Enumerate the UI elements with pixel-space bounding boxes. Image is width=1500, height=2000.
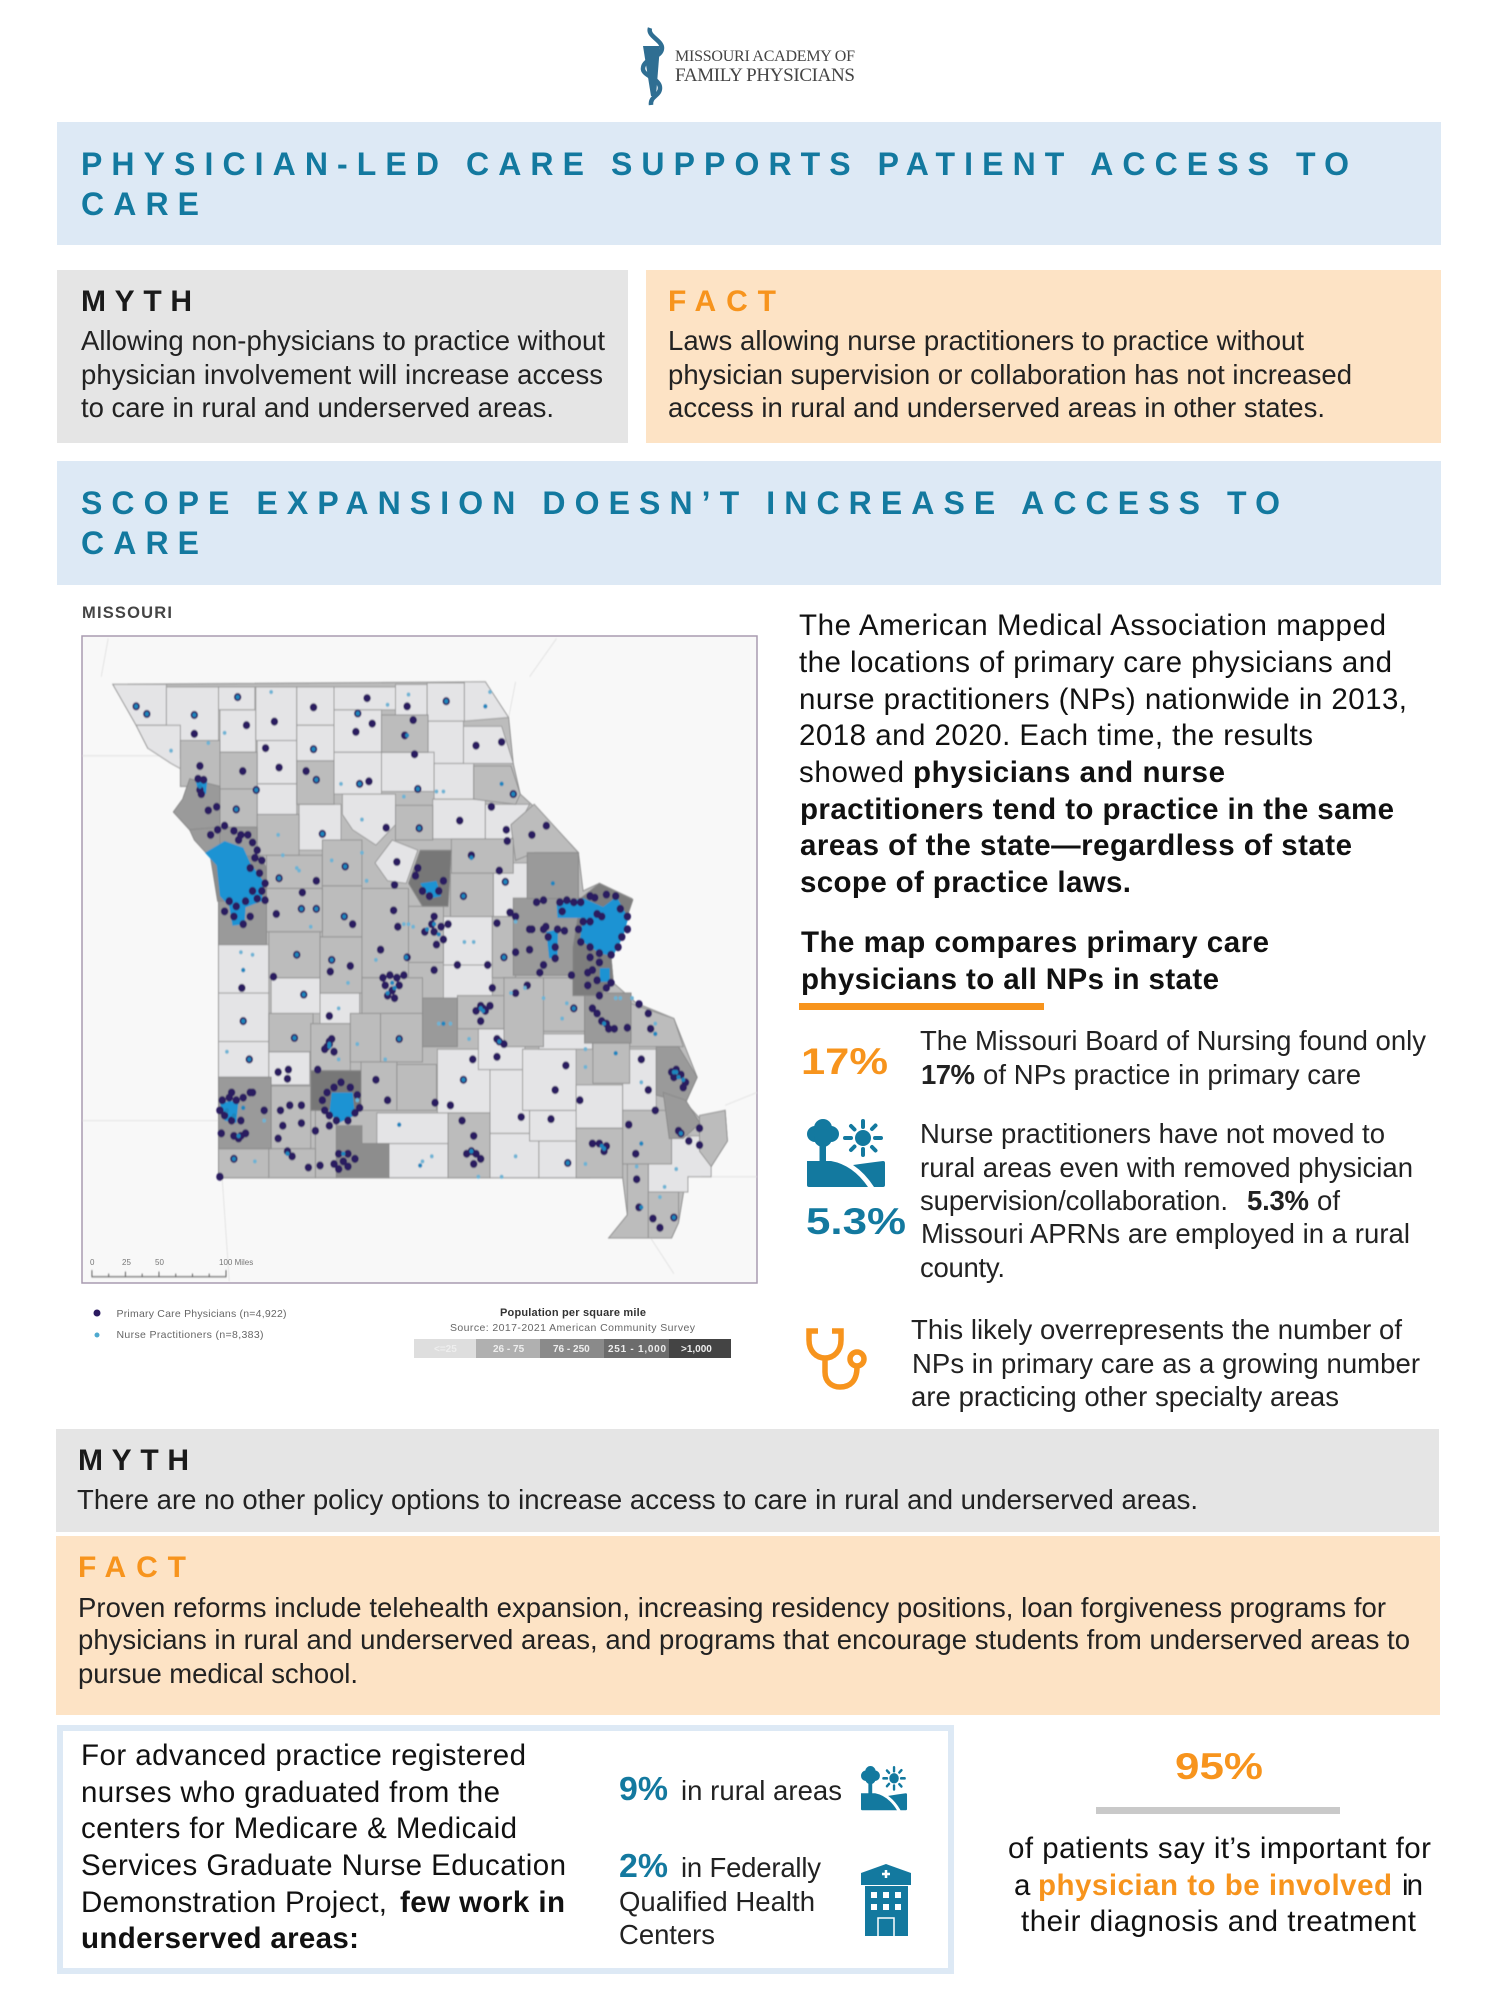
panel: APRN graduate outcomes: nurses who graduated from the xyxy=(81,1776,500,1809)
panel: APRN graduate outcomes: Demonstration Project, xyxy=(81,1886,387,1919)
state silhouette xyxy=(113,682,727,1238)
scale labels: 25 xyxy=(122,1258,131,1267)
icon: hospital xyxy=(861,1864,911,1936)
stat: 5.3% rural: of xyxy=(1317,1185,1340,1216)
panel: myth 2: MYTH xyxy=(78,1444,189,1477)
panel: fact 2: pursue medical school. xyxy=(78,1658,358,1689)
legend: dot types xyxy=(94,1308,286,1341)
stat: 17%: 17% xyxy=(801,1041,888,1082)
text block: AMA mapping summary: nurse practitioners (NPs) nationwide in 2013, xyxy=(799,683,1407,716)
stat: 5.3% rural: Missouri APRNs are employed in a rural xyxy=(921,1218,1410,1249)
scale labels: 50 xyxy=(155,1258,164,1267)
scale labels: 100 Miles xyxy=(219,1258,253,1267)
text block: AMA mapping summary: areas of the state—regardless of state xyxy=(800,829,1352,862)
scale labels: 0 xyxy=(90,1258,95,1267)
panel: myth 1: MYTH xyxy=(81,285,192,318)
panel: fact 2: Proven reforms include telehealth expansion, increasing residency positions, loan forgiveness programs for xyxy=(78,1592,1386,1623)
stat: 9% rural xyxy=(619,1770,842,1807)
stat: 17%: The Missouri Board of Nursing found only xyxy=(920,1025,1426,1056)
panel: scope expansion heading: SCOPE EXPANSION DOESN’T INCREASE ACCESS TO xyxy=(81,485,1280,521)
text block: AMA mapping summary: scope of practice laws. xyxy=(800,866,1131,899)
panel: fact 1 xyxy=(646,270,1441,443)
stat: 5.3% rural: rural areas even with removed physician xyxy=(920,1152,1413,1183)
stat: 17%: 17% xyxy=(921,1059,975,1090)
subheading: map comparison xyxy=(799,926,1269,1010)
stat: 5.3% rural: 5.3% xyxy=(1247,1185,1309,1216)
text block: AMA mapping summary: 2018 and 2020. Each time, the results xyxy=(799,719,1313,752)
icon: stethoscope xyxy=(809,1331,864,1387)
legend: population density xyxy=(414,1307,731,1358)
legend: population density: Source: 2017-2021 American Community Survey xyxy=(450,1322,696,1334)
legend: population density: <=25 xyxy=(434,1344,457,1355)
panel: scope expansion heading: CARE xyxy=(81,525,199,561)
primary care physician dots xyxy=(136,697,700,1228)
panel: APRN graduate outcomes: underserved areas: xyxy=(81,1922,359,1955)
stat: 5.3% rural: 5.3% xyxy=(806,1201,906,1242)
stat: overrepresentation note: are practicing other specialty areas xyxy=(911,1381,1339,1412)
panel: fact 2: FACT xyxy=(78,1551,186,1584)
scale bar xyxy=(92,1270,226,1277)
callout: 95% of patients xyxy=(1008,1746,1431,1938)
stat: 9% rural: 9% xyxy=(619,1770,668,1807)
county choropleth and practitioner dots xyxy=(83,638,757,1281)
callout: 95% of patients: physician to be involved xyxy=(1038,1869,1392,1902)
panel: fact 2: physicians in rural and underserved areas, and programs that encourage students from underserved areas to xyxy=(78,1624,1410,1655)
legend: population density: 76 - 250 xyxy=(553,1344,590,1355)
stat: 5.3% rural: Nurse practitioners have not moved to xyxy=(920,1118,1385,1149)
text block: AMA mapping summary: practitioners tend to practice in the same xyxy=(800,793,1394,826)
logo: Missouri Academy of Family Physicians: MISSOURI ACADEMY OF xyxy=(675,48,855,65)
legend: dot types: Nurse Practitioners (n=8,383) xyxy=(116,1329,264,1341)
stat: 5.3% rural xyxy=(806,1118,1413,1283)
panel: myth 1: Allowing non-physicians to practice without xyxy=(81,325,605,356)
dense nurse practitioner clusters xyxy=(195,778,628,1123)
stat: 5.3% rural: supervision/collaboration. xyxy=(920,1185,1228,1216)
subheading: map comparison: The map compares primary care xyxy=(801,926,1269,959)
callout: 95% of patients: their diagnosis and treatment xyxy=(1021,1905,1416,1938)
stat: overrepresentation note xyxy=(809,1314,1420,1412)
panel: APRN graduate outcomes: Services Graduate Nurse Education xyxy=(81,1849,566,1882)
nurse practitioner dots xyxy=(136,697,683,1218)
stat: 2% FQHC: in Federally xyxy=(681,1852,821,1883)
panel: fact 1: FACT xyxy=(668,285,776,318)
text block: AMA mapping summary: The American Medical Association mapped xyxy=(799,609,1386,642)
panel: myth 2: There are no other policy options to increase access to care in rural and underserved areas. xyxy=(77,1484,1198,1515)
text block: AMA mapping summary: the locations of primary care physicians and xyxy=(799,646,1392,679)
panel: myth 1: physician involvement will increase access xyxy=(81,359,603,390)
map: Missouri physicians and nurse practitioners xyxy=(82,604,757,1358)
panel: myth 1 xyxy=(57,270,628,443)
stat: 5.3% rural: county. xyxy=(920,1252,1005,1283)
stat: 9% rural: in rural areas xyxy=(681,1775,842,1806)
panel: APRN graduate outcomes: few work in xyxy=(400,1886,565,1919)
stat: 2% FQHC xyxy=(619,1847,821,1950)
logo: Missouri Academy of Family Physicians: FAMILY PHYSICIANS xyxy=(675,65,855,86)
map frame xyxy=(82,636,757,1283)
map title: MISSOURI xyxy=(82,604,172,622)
panel: fact 1: physician supervision or collaboration has not increased xyxy=(668,359,1352,390)
callout: 95% of patients: 95% xyxy=(1175,1746,1263,1787)
scale labels xyxy=(90,1258,253,1267)
panel: APRN graduate outcomes: For advanced practice registered xyxy=(81,1739,526,1772)
panel: main heading xyxy=(57,122,1441,245)
panel: myth 2 xyxy=(56,1429,1439,1532)
text block: AMA mapping summary: showed xyxy=(799,756,904,789)
panel: fact 2 xyxy=(56,1536,1440,1715)
legend: dot types: Primary Care Physicians (n=4,922) xyxy=(116,1308,286,1320)
icon: rural landscape xyxy=(807,1119,885,1187)
panel: scope expansion heading xyxy=(57,461,1441,585)
legend: population density: >1,000 xyxy=(681,1344,712,1355)
icon: rural landscape small xyxy=(861,1766,907,1810)
stat: 2% FQHC: Centers xyxy=(619,1919,715,1950)
text block: AMA mapping summary xyxy=(799,609,1407,899)
panel: myth 1: to care in rural and underserved areas. xyxy=(81,392,554,423)
legend: population density: 26 - 75 xyxy=(493,1344,525,1355)
panel: APRN graduate outcomes xyxy=(60,1728,951,1971)
panel: fact 1: access in rural and underserved areas in other states. xyxy=(668,392,1325,423)
callout: 95% of patients: a xyxy=(1014,1869,1031,1902)
stat: overrepresentation note: This likely overrepresents the number of xyxy=(911,1314,1402,1345)
logo: Missouri Academy of Family Physicians xyxy=(643,28,855,105)
stat: 17% xyxy=(801,1025,1426,1090)
panel: APRN graduate outcomes: centers for Medicare & Medicaid xyxy=(81,1812,517,1845)
callout: 95% of patients: in xyxy=(1402,1869,1423,1902)
stat: overrepresentation note: NPs in primary care as a growing number xyxy=(912,1348,1420,1379)
panel: main heading: CARE xyxy=(81,186,199,222)
callout: 95% of patients: of patients say it’s important for xyxy=(1008,1832,1431,1865)
panel: main heading: PHYSICIAN-LED CARE SUPPORTS PATIENT ACCESS TO xyxy=(81,146,1349,182)
legend: population density: Population per square mile xyxy=(500,1307,646,1319)
stat: 2% FQHC: Qualified Health xyxy=(619,1886,815,1917)
text block: AMA mapping summary: physicians and nurse xyxy=(913,756,1225,789)
panel: fact 1: Laws allowing nurse practitioners to practice without xyxy=(668,325,1304,356)
stat: 17%: of NPs practice in primary care xyxy=(983,1059,1361,1090)
stat: 2% FQHC: 2% xyxy=(619,1847,668,1884)
legend: population density: 251 - 1,000 xyxy=(608,1344,666,1355)
subheading: map comparison: physicians to all NPs in state xyxy=(801,963,1219,996)
